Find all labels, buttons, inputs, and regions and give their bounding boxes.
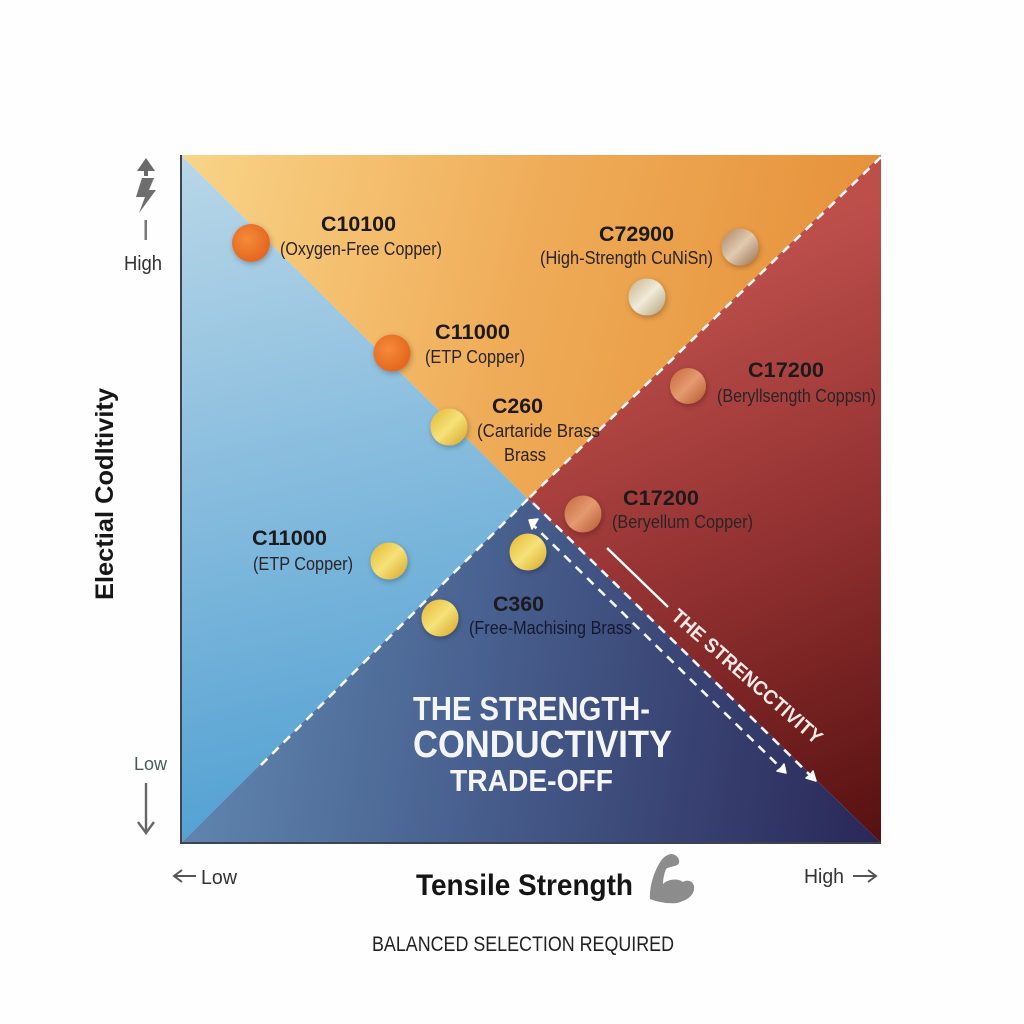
- material: C17200 lower: C17200: [623, 487, 699, 510]
- chart title: TRADE-OFF: [450, 763, 613, 798]
- x axis low label: [174, 867, 238, 889]
- material: C11000 upper: (ETP Copper): [425, 347, 525, 367]
- chart quadrants: [181, 155, 881, 843]
- material: C72900: [540, 223, 758, 316]
- chart axes: [181, 155, 881, 843]
- material: C11000 upper: [374, 321, 525, 372]
- chart title: CONDUCTIVITY: [413, 724, 672, 766]
- dashed diagonals: [258, 157, 881, 780]
- material: C11000 lower: C11000: [252, 527, 327, 550]
- label: conductivity high: High: [124, 253, 162, 275]
- material: C11000 lower: (ETP Copper): [253, 554, 353, 574]
- material: C260: (Cartaride Brass: [477, 421, 600, 441]
- material: C72900: (High-Strength CuNiSn): [540, 248, 713, 268]
- material: C260: [430, 395, 600, 465]
- material: C360: C360: [493, 593, 544, 616]
- material: C17200 lower: (Beryellum Copper): [612, 512, 753, 532]
- y axis title: Electial Codltivity: [91, 388, 119, 600]
- material: C72900: C72900: [599, 223, 674, 246]
- icon: flexed bicep: [650, 854, 694, 903]
- icon: lightning bolt: [136, 178, 156, 213]
- x axis high label: High: [804, 866, 844, 888]
- material: C10100: (Oxygen-Free Copper): [280, 239, 442, 259]
- chart title: [413, 690, 672, 798]
- material: C10100: C10100: [321, 213, 396, 236]
- material: C360: [422, 534, 632, 638]
- material: C17200 lower: [564, 487, 753, 532]
- material: C17200 upper: (Beryllsength Coppsn): [717, 386, 876, 406]
- material: C17200 upper: C17200: [748, 359, 824, 382]
- icon: down arrow: [138, 783, 154, 833]
- diagonal annotation: [607, 548, 827, 749]
- material: C10100: [232, 213, 442, 262]
- label: conductivity low: Low: [134, 754, 168, 774]
- high marker tick: [144, 220, 147, 240]
- x axis title: Tensile Strength: [416, 869, 633, 902]
- material: C260: C260: [492, 395, 543, 418]
- x axis low label: Low: [201, 867, 238, 889]
- material: C360: (Free-Machising Brass: [469, 618, 632, 638]
- material: C11000 upper: C11000: [435, 321, 510, 344]
- material: C11000 lower: [252, 527, 408, 580]
- material: C260: Brass: [504, 445, 546, 465]
- material: C17200 upper: [670, 359, 876, 406]
- x axis high label: [804, 866, 876, 888]
- trade-off arrows: [529, 519, 816, 781]
- diagonal annotation: THE STRENCCTIVITY: [667, 605, 827, 749]
- footer caption: BALANCED SELECTION REQUIRED: [372, 933, 674, 956]
- icon: up arrow: [137, 158, 155, 176]
- chart title: THE STRENGTH-: [413, 690, 650, 727]
